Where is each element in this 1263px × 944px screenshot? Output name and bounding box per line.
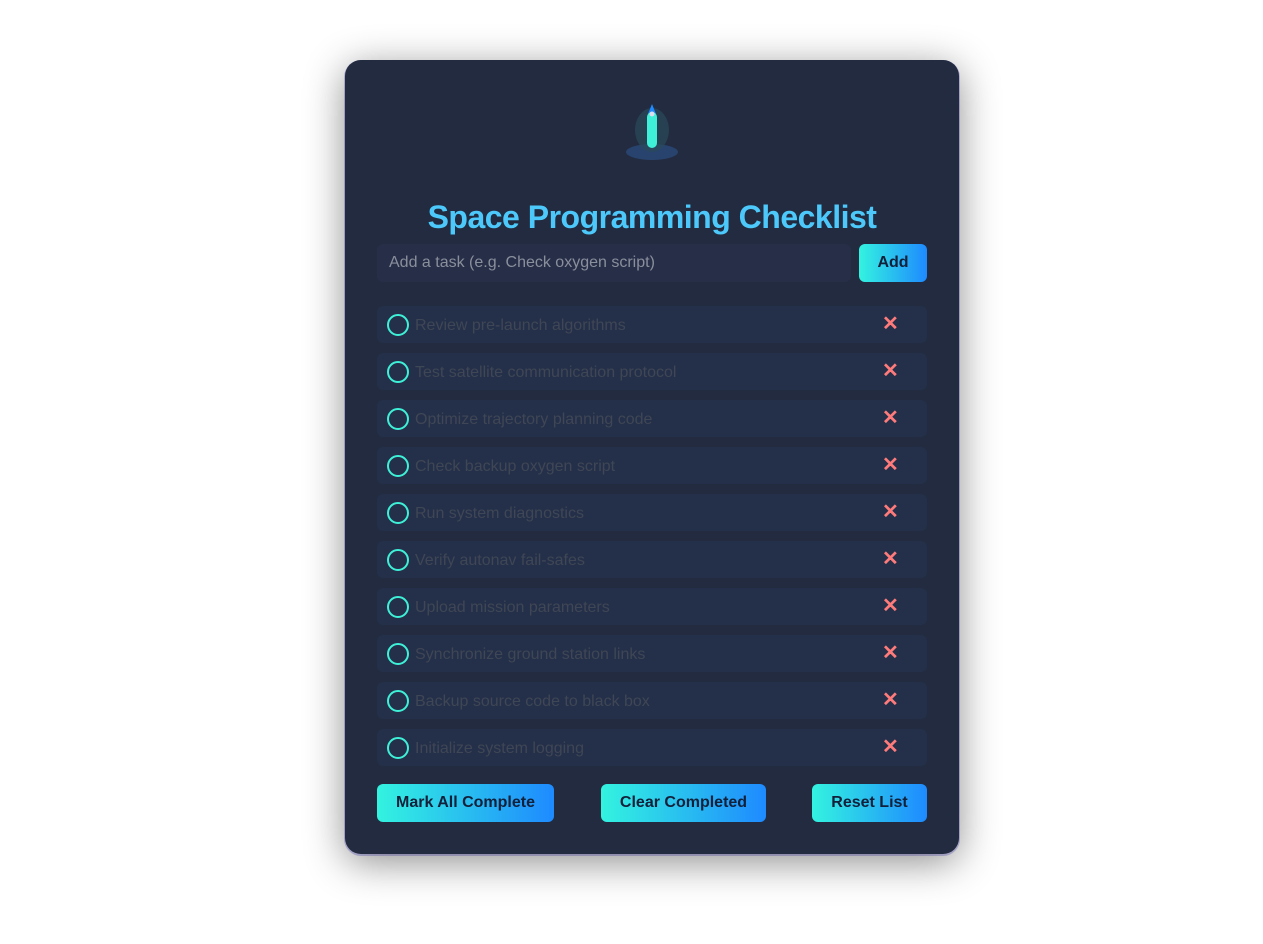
button: clear completed: Clear Completed — [620, 794, 747, 811]
task list — [377, 306, 927, 766]
task row 4: ✕ — [882, 454, 899, 476]
button: mark all complete: Mark All Complete — [396, 794, 535, 811]
icon: rocket — [626, 104, 678, 160]
task row 1: ✕ — [882, 313, 899, 335]
task row 2: ✕ — [882, 360, 899, 382]
task row 9 — [377, 682, 927, 719]
panel: checklist card — [345, 60, 959, 854]
task row 3: Optimize trajectory planning code — [415, 411, 652, 428]
task row 7 — [377, 588, 927, 625]
button: mark all complete — [377, 784, 554, 822]
title: Space Programming Checklist — [428, 199, 876, 235]
task row 1: Review pre-launch algorithms — [415, 317, 626, 334]
task row 8: ✕ — [882, 642, 899, 664]
task row 10: Initialize system logging — [415, 740, 584, 757]
task row 1 — [377, 306, 927, 343]
task row 10 — [377, 729, 927, 766]
task row 3 — [377, 400, 927, 437]
task row 5 — [377, 494, 927, 531]
button: reset list — [812, 784, 927, 822]
task row 2 — [377, 353, 927, 390]
task row 3: ✕ — [882, 407, 899, 429]
task row 4 — [377, 447, 927, 484]
task row 9: Backup source code to black box — [415, 693, 650, 710]
task row 5: Run system diagnostics — [415, 505, 584, 522]
task row 8: Synchronize ground station links — [415, 646, 645, 663]
task row 6 — [377, 541, 927, 578]
task row 9: ✕ — [882, 689, 899, 711]
task row 4: Check backup oxygen script — [415, 458, 615, 475]
input field — [377, 244, 851, 282]
button: add — [859, 244, 927, 282]
task row 7: ✕ — [882, 595, 899, 617]
input field: Add a task (e.g. Check oxygen script) — [389, 254, 655, 271]
task row 5: ✕ — [882, 501, 899, 523]
task row 2: Test satellite communication protocol — [415, 364, 676, 381]
button: add: Add — [877, 254, 909, 271]
task row 8 — [377, 635, 927, 672]
button: clear completed — [601, 784, 766, 822]
task row 6: Verify autonav fail-safes — [415, 552, 585, 569]
button: reset list: Reset List — [831, 794, 908, 811]
task row 7: Upload mission parameters — [415, 599, 610, 616]
task row 10: ✕ — [882, 736, 899, 758]
task row 6: ✕ — [882, 548, 899, 570]
